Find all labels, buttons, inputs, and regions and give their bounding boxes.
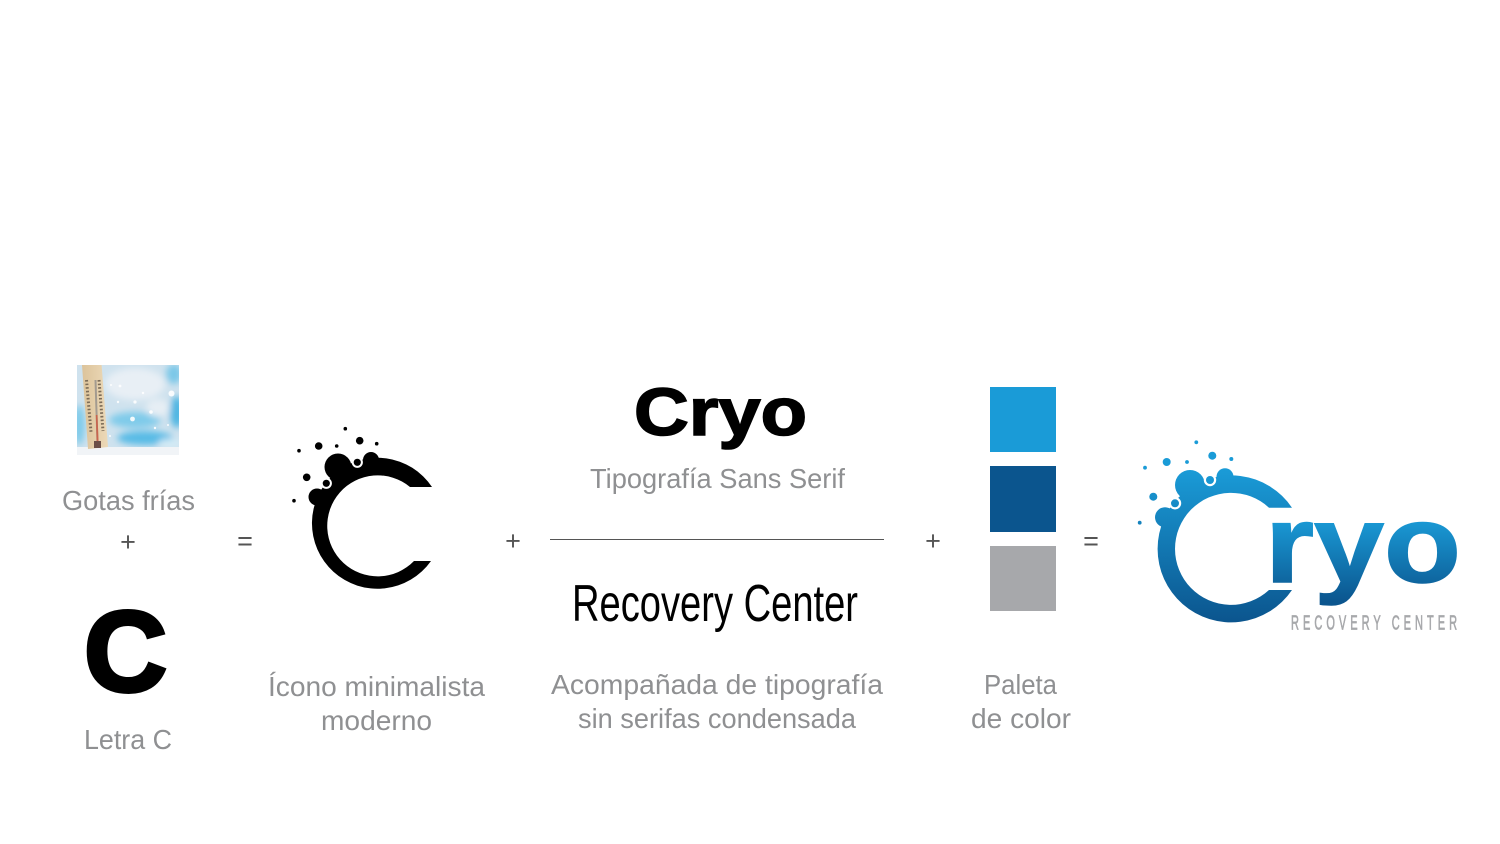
- thermometer body: [82, 364, 108, 449]
- caption: Ícono minimalista moderno: moderno: [321, 705, 432, 736]
- letter C: C: [84, 589, 167, 716]
- caption: Acompañada de tipografía sin serifas condensada: Acompañada de tipografía: [551, 669, 883, 700]
- photo: thermometer in snow: [73, 364, 184, 455]
- logo icon: blue C with bubbles: [1138, 440, 1292, 622]
- logo wordmark: ryo: ryo: [1265, 483, 1461, 606]
- caption: Paleta de color: [971, 669, 1071, 734]
- caption: Paleta de color: Paleta: [984, 669, 1057, 700]
- equals sign: =: [237, 526, 253, 556]
- plus sign: +: [505, 526, 521, 556]
- final logo: Cryo Recovery Center: [1138, 440, 1461, 634]
- colour palette swatches: [990, 387, 1056, 611]
- caption: Acompañada de tipografía sin serifas condensada: [551, 669, 883, 734]
- caption: Gotas frías: Gotas frías: [62, 485, 195, 516]
- equals sign: =: [1083, 526, 1099, 556]
- caption: Ícono minimalista moderno: [268, 671, 485, 736]
- caption: Tipografía Sans Serif: Tipografía Sans Serif: [590, 463, 845, 494]
- wordmark: Recovery Center: Recovery Center: [572, 575, 858, 633]
- plus sign: +: [925, 526, 941, 556]
- logo tagline: RECOVERY CENTER: RECOVERY CENTER: [1291, 612, 1457, 634]
- plus sign: +: [120, 527, 136, 557]
- caption: Ícono minimalista moderno: Ícono minimalista: [268, 671, 485, 702]
- wordmark: Cryo: Cryo: [634, 375, 807, 450]
- caption: Acompañada de tipografía sin serifas condensada: sin serifas condensada: [578, 703, 856, 734]
- caption: Paleta de color: de color: [971, 703, 1071, 734]
- icon: minimalist C with bubbles: [292, 427, 432, 589]
- caption: Letra C: Letra C: [84, 724, 172, 755]
